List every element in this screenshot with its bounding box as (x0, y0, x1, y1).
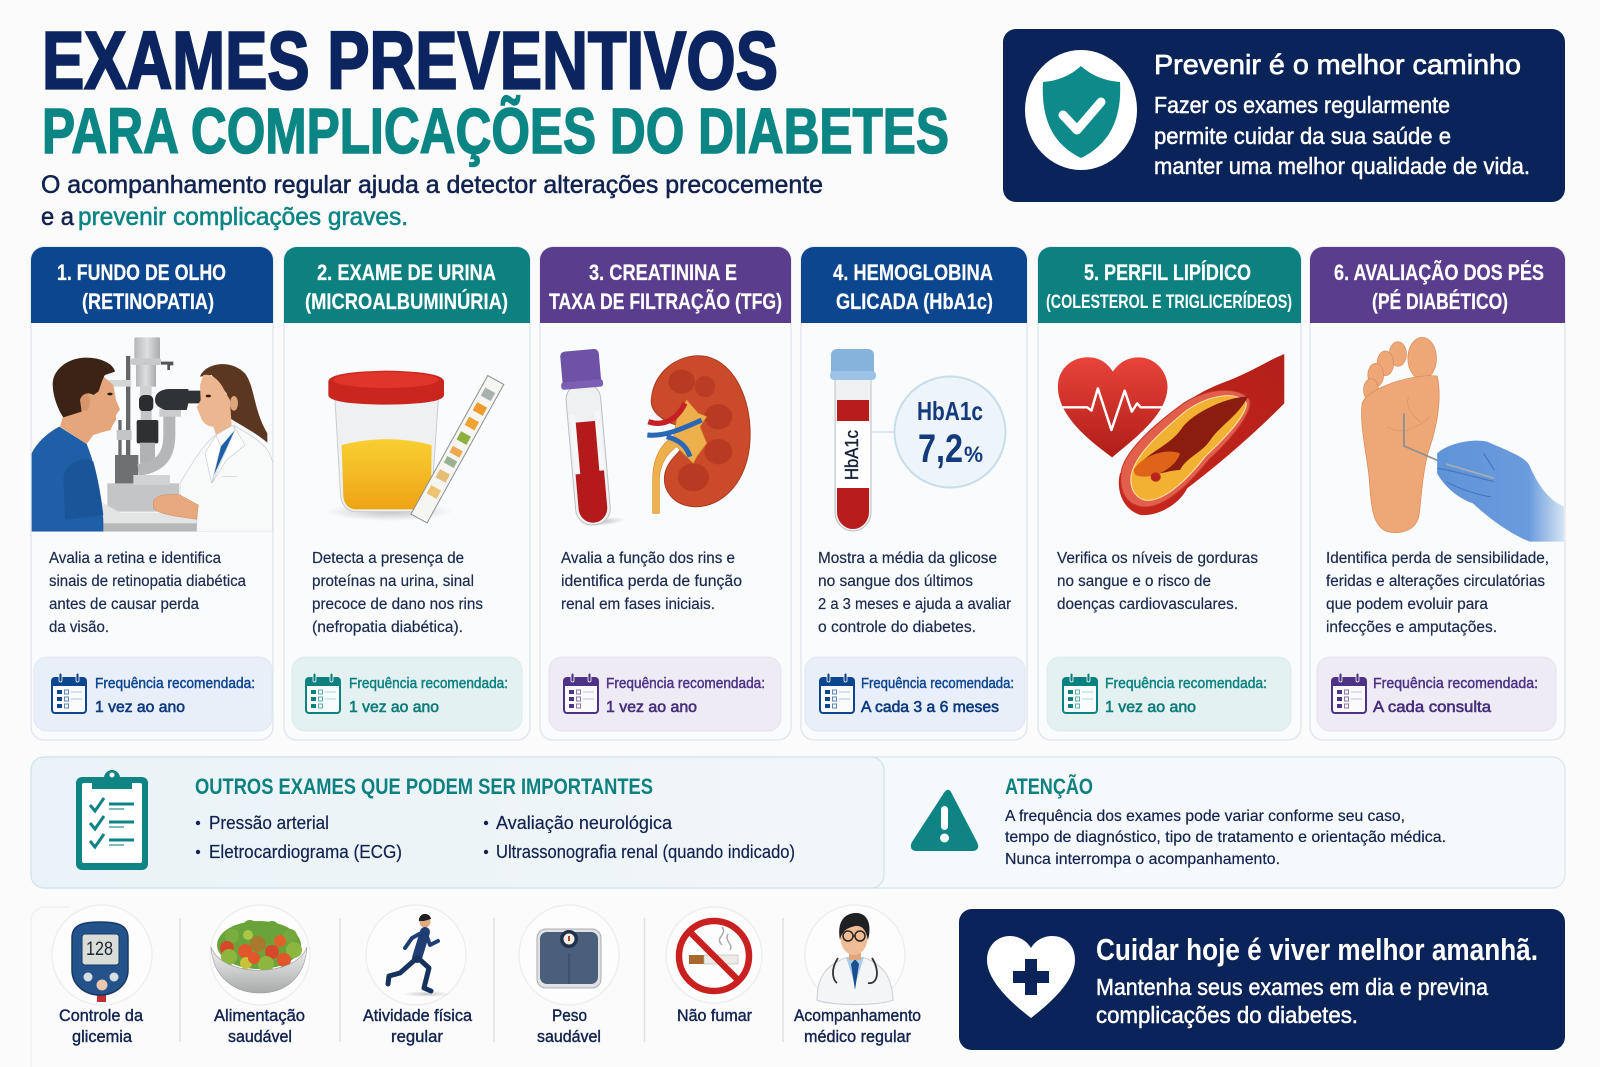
illustration: heart and artery (1058, 354, 1284, 515)
frequency: fundo de olho: 1 vez ao ano (95, 699, 185, 716)
text: exame de urina (312, 550, 483, 636)
panel: avaliação dos pés (1310, 247, 1565, 740)
text: fundo de olho: sinais de retinopatia diabética (49, 573, 246, 590)
label: peso saudável: Peso (552, 1006, 587, 1025)
heading: exame de urina: 2. EXAME DE URINA (317, 260, 496, 285)
icon: glucose meter (52, 905, 152, 1005)
label: acompanhamento médico: Acompanhamento (794, 1006, 921, 1025)
label: controle da glicemia (59, 1006, 144, 1046)
text: hemoglobina: o controle do diabetes. (818, 619, 976, 636)
panel: hemoglobina glicada (801, 247, 1027, 740)
callout: cuidar hoje: complicações do diabetes. (1096, 1002, 1358, 1028)
frequency: perfil lipídico: Frequência recomendada: (1105, 675, 1267, 692)
heading: avaliação dos pés: (PÉ DIABÉTICO) (1372, 289, 1508, 314)
tube (835, 378, 871, 531)
panel: hábitos saudáveis (31, 905, 921, 1067)
frequency: perfil lipídico: 1 vez ao ano (1105, 699, 1196, 716)
text: exame de urina: precoce de dano nos rins (312, 596, 483, 613)
heading: hemoglobina: 4. HEMOGLOBINA (833, 260, 993, 285)
label: controle da glicemia: glicemia (72, 1027, 133, 1046)
icon: bathroom scale (519, 905, 619, 1005)
panel: atenção: ATENÇÃO (1005, 774, 1093, 799)
blood tube (558, 348, 626, 528)
result bubble: 7,2 (918, 427, 963, 471)
text: perfil lipídico (1057, 550, 1258, 613)
text: avaliação dos pés: infecções e amputações. (1326, 619, 1497, 636)
heading: fundo de olho: 1. FUNDO DE OLHO (57, 260, 226, 285)
text: hemoglobina: no sangue dos últimos (818, 573, 973, 590)
text: exame de urina: (nefropatia diabética). (312, 619, 463, 636)
heading: creatinina: TAXA DE FILTRAÇÃO (TFG) (549, 289, 782, 314)
text: creatinina (561, 550, 742, 613)
label: alimentação saudável: saudável (228, 1027, 292, 1046)
callout: prevenir é o melhor caminho: Fazer os exames regularmente (1154, 92, 1450, 118)
illustration: urine cup and strip (327, 371, 504, 523)
text: perfil lipídico: doenças cardiovasculares. (1057, 596, 1238, 613)
foot (1362, 337, 1439, 533)
label: atividade física: regular (391, 1027, 443, 1046)
frequency: fundo de olho: Frequência recomendada: (95, 675, 255, 692)
text: avaliação dos pés: feridas e alterações circulatórias (1326, 573, 1545, 590)
text: exame de urina: Detecta a presença de (312, 550, 464, 567)
result bubble: HbA1c (917, 396, 983, 426)
label: acompanhamento médico (794, 1006, 921, 1046)
panel: exame de urina (284, 247, 530, 740)
frequency: creatinina (549, 657, 781, 731)
text: creatinina: Avalia a função dos rins e (561, 550, 735, 567)
callout: cuidar hoje: Mantenha seus exames em dia e previna (1096, 974, 1488, 1000)
heading: exame de urina: (MICROALBUMINÚRIA) (305, 289, 508, 314)
label: acompanhamento médico: médico regular (804, 1027, 911, 1046)
text: fundo de olho: da visão. (49, 619, 109, 636)
heading: avaliação dos pés (1310, 247, 1565, 323)
frequency: avaliação dos pés: Frequência recomendada: (1373, 675, 1538, 692)
result bubble: % (964, 442, 983, 467)
panel: creatinina (540, 247, 791, 740)
illustration: blood tube and kidney (558, 348, 750, 528)
frequency: avaliação dos pés: A cada consulta (1373, 699, 1491, 716)
frequency: exame de urina: Frequência recomendada: (349, 675, 508, 692)
label: peso saudável (537, 1006, 601, 1046)
label: não fumar: Não fumar (677, 1006, 752, 1025)
doctor (153, 364, 273, 532)
text: fundo de olho (49, 550, 246, 636)
heading: perfil lipídico: 5. PERFIL LIPÍDICO (1084, 260, 1251, 285)
heading: fundo de olho (31, 247, 273, 323)
list of other exams (196, 813, 795, 862)
frequency: avaliação dos pés (1317, 657, 1556, 731)
label: controle da glicemia: Controle da (59, 1006, 144, 1025)
frequency: hemoglobina: A cada 3 a 6 meses (861, 699, 999, 716)
patient (32, 358, 120, 532)
heading: perfil lipídico: (COLESTEROL E TRIGLICERÍDEOS) (1046, 291, 1292, 313)
text: fundo de olho: antes de causar perda (49, 596, 199, 613)
text: creatinina: identifica perda de função (561, 573, 742, 590)
heart (1058, 357, 1167, 457)
icon: runner (366, 905, 466, 1005)
list of other exams: Pressão arterial (209, 813, 329, 833)
list of other exams: Avaliação neurológica (496, 813, 673, 833)
frequency: creatinina: Frequência recomendada: (606, 675, 765, 692)
kidney (647, 356, 750, 513)
result bubble (894, 376, 1006, 488)
frequency: exame de urina: 1 vez ao ano (349, 699, 439, 716)
text: hemoglobina: Mostra a média da glicose (818, 550, 997, 567)
text: exame de urina: proteínas na urina, sinal (312, 573, 474, 590)
heading: hemoglobina: GLICADA (HbA1c) (836, 289, 993, 314)
illustration: HbA1c tube and result: HbA1c (842, 430, 862, 480)
icon: salad bowl (210, 905, 310, 1005)
frequency: hemoglobina (805, 657, 1025, 731)
illustration: HbA1c tube and result (830, 349, 1006, 531)
panel: outros exames: OUTROS EXAMES QUE PODEM SER IMPORTANTES (195, 774, 653, 799)
heading: exame de urina (284, 247, 530, 323)
callout: prevenir é o melhor caminho (1003, 29, 1565, 202)
artery (1119, 354, 1284, 515)
gloved hand (1437, 441, 1564, 542)
text: perfil lipídico: Verifica os níveis de gorduras (1057, 550, 1258, 567)
frequency: fundo de olho (34, 657, 272, 731)
heading: hemoglobina (801, 247, 1027, 323)
subtitle: e a (41, 203, 74, 231)
text: hemoglobina: 2 a 3 meses e ajuda a avaliar (818, 596, 1011, 613)
heading: creatinina (540, 247, 791, 323)
subtitle: prevenir complicações graves. (78, 203, 408, 231)
label: atividade física: Atividade física (363, 1006, 473, 1025)
subtitle (41, 171, 823, 231)
panel: atenção (31, 757, 1565, 888)
illustration: foot and monofilament (1362, 337, 1564, 542)
frequency: creatinina: 1 vez ao ano (606, 699, 697, 716)
list of other exams: Eletrocardiograma (ECG) (209, 842, 402, 862)
callout: prevenir é o melhor caminho: permite cuidar da sua saúde e (1154, 123, 1451, 149)
panel: atenção: Nunca interrompa o acompanhamento. (1005, 851, 1280, 868)
icon: warning triangle (911, 790, 978, 851)
callout: prevenir é o melhor caminho: Prevenir é o melhor caminho (1154, 49, 1521, 80)
icon: doctor (805, 905, 905, 1005)
frequency: perfil lipídico (1047, 657, 1291, 731)
heading: fundo de olho: (RETINOPATIA) (82, 289, 214, 314)
panel: atenção: A frequência dos exames pode variar conforme seu caso, (1005, 808, 1405, 825)
heading: creatinina: 3. CREATININA E (589, 260, 737, 285)
text: avaliação dos pés: que podem evoluir para (1326, 596, 1488, 613)
panel: outros exames (31, 757, 884, 888)
label: alimentação saudável (214, 1006, 305, 1046)
text: avaliação dos pés (1326, 550, 1549, 636)
label: peso saudável: saudável (537, 1027, 601, 1046)
list of other exams: Ultrassonografia renal (quando indicado) (496, 842, 795, 862)
text: avaliação dos pés: Identifica perda de sensibilidade, (1326, 550, 1549, 567)
label: atividade física (363, 1006, 473, 1046)
text: creatinina: renal em fases iniciais. (561, 596, 715, 613)
panel: perfil lipídico (1038, 247, 1301, 740)
label: alimentação saudável: Alimentação (214, 1006, 305, 1025)
text: hemoglobina (818, 550, 1011, 636)
icon: no smoking (666, 907, 762, 1003)
title (42, 16, 949, 167)
text: fundo de olho: Avalia a retina e identifica (49, 550, 221, 567)
heading: perfil lipídico (1038, 247, 1301, 323)
illustration: eye exam (32, 337, 273, 532)
icon: clipboard (76, 770, 148, 870)
heading: avaliação dos pés: 6. AVALIAÇÃO DOS PÉS (1334, 260, 1544, 285)
text: perfil lipídico: no sangue e o risco de (1057, 573, 1211, 590)
frequency: hemoglobina: Frequência recomendada: (861, 675, 1014, 692)
title: PARA COMPLICAÇÕES DO DIABETES (42, 95, 949, 167)
callout: cuidar hoje (959, 909, 1565, 1050)
slit lamp (103, 337, 206, 532)
panel: atenção: tempo de diagnóstico, tipo de tratamento e orientação médica. (1005, 829, 1446, 846)
icon: heart with cross (987, 936, 1075, 1018)
title: EXAMES PREVENTIVOS (42, 16, 778, 106)
panel: fundo de olho (31, 247, 273, 740)
icon: glucose meter: 128 (86, 939, 113, 960)
callout: prevenir é o melhor caminho: manter uma melhor qualidade de vida. (1154, 153, 1530, 179)
icon: shield with check (1025, 50, 1137, 170)
frequency: exame de urina (292, 657, 522, 731)
subtitle: O acompanhamento regular ajuda a detector alterações precocemente (41, 171, 823, 199)
